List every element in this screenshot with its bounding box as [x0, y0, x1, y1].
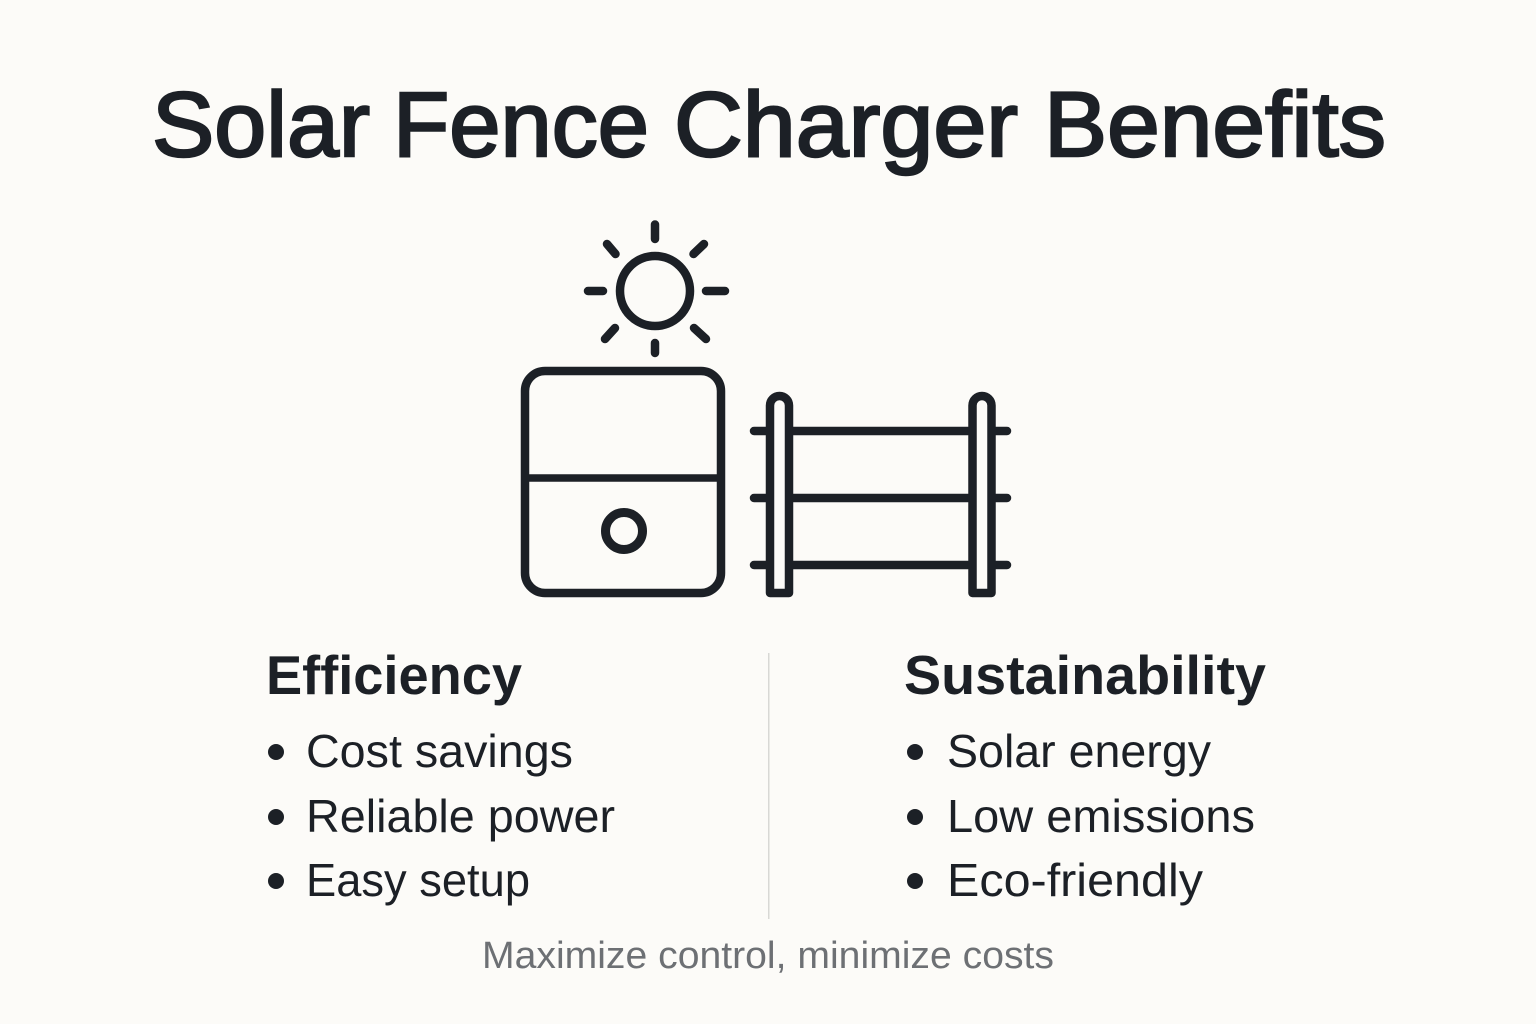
list: sustainability items: Solar energy: [947, 725, 1211, 777]
title: Charger: [674, 74, 1018, 176]
title: Solar: [152, 74, 370, 176]
title: [152, 74, 1386, 176]
list: efficiency items: Easy setup: [306, 854, 530, 906]
list: sustainability items: Low emissions: [947, 790, 1255, 842]
panel: sustainability: [904, 644, 1266, 906]
title: Fence: [393, 74, 649, 176]
list: efficiency items: Reliable power: [306, 790, 615, 842]
icon: solar charger box: [525, 371, 721, 593]
heading: efficiency: Efficiency: [266, 644, 522, 706]
heading: sustainability: Sustainability: [904, 644, 1266, 706]
list: efficiency items: Cost savings: [306, 725, 573, 777]
panel: efficiency: [266, 644, 615, 906]
icon: fence: [754, 396, 1007, 593]
list: sustainability items: Eco-friendly: [947, 854, 1203, 906]
icon: sun: [588, 224, 725, 353]
tagline: Maximize control, minimize costs: [482, 935, 1054, 977]
list: efficiency items: [268, 725, 615, 906]
title: Benefits: [1044, 74, 1386, 176]
list: sustainability items: [907, 725, 1255, 906]
